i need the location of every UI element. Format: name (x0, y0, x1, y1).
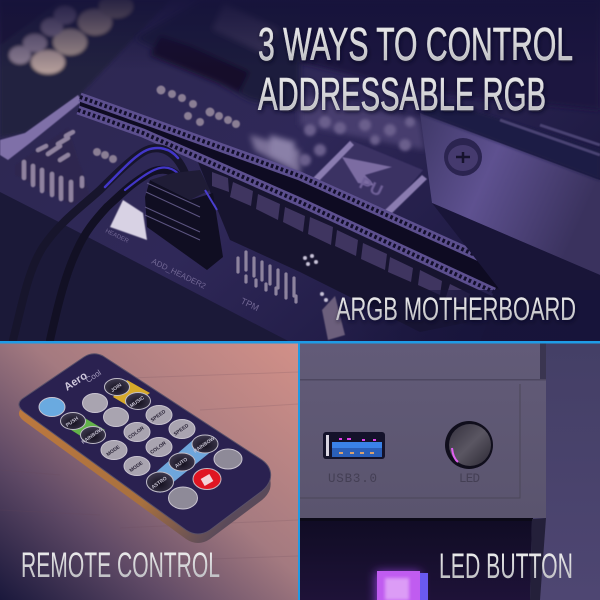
remote body: RAINBOW (193, 436, 216, 455)
button labels (106, 409, 190, 474)
remote logo: Aero (62, 370, 90, 394)
ARGB connector (145, 170, 223, 270)
panel: remote control (0, 343, 298, 600)
TPM pin header (238, 252, 296, 302)
board edge text: ADD_HEADER2 (150, 257, 208, 291)
lock button (193, 468, 221, 490)
remote buttons (39, 394, 242, 509)
remote body: ASTRO (151, 476, 168, 491)
wood grain (137, 372, 298, 558)
remote body: Cool (84, 368, 103, 385)
white connector (110, 200, 147, 240)
header pins, left (21, 129, 85, 203)
button labels: MODE (129, 460, 145, 474)
colour bands (113, 380, 150, 407)
blurred components (93, 86, 240, 163)
heatsink plate with screw (420, 100, 600, 275)
light heatsink edge (0, 95, 82, 160)
dark top face (19, 354, 271, 534)
gold side edge (19, 410, 271, 543)
blue divider lines (0, 341, 600, 600)
remote body: PUSH (65, 416, 80, 429)
remote body (19, 354, 271, 543)
panel: ARGB motherboard (0, 0, 600, 342)
panel: LED button (300, 343, 600, 600)
purple LED fan glow (377, 571, 420, 600)
chip with logo (313, 140, 427, 215)
button labels: MODE (106, 444, 122, 458)
cables (13, 148, 185, 340)
board edge text: TPM (239, 296, 261, 313)
blurred RAM / chipset region (139, 14, 599, 172)
board edge text (104, 228, 261, 313)
remote body: AUTO (174, 457, 189, 470)
blurred heatsink with capacitors (0, 0, 144, 137)
shadow band beneath PCIe slots (198, 162, 500, 332)
USB label: USB3.0 (328, 472, 377, 486)
case ledge (300, 379, 546, 380)
PCIe slots (78, 97, 524, 306)
chip with logo: PU (356, 173, 386, 201)
small right-side board parts (303, 254, 345, 340)
LED label: LED (459, 472, 480, 486)
button labels: COLOR (149, 440, 168, 456)
chokes under the slot (212, 172, 470, 306)
USB port (323, 432, 385, 459)
case dark edge (540, 343, 546, 379)
desk surface (0, 192, 290, 342)
case front (300, 343, 546, 518)
remote body: MUSIC (129, 395, 146, 409)
glass side panel (300, 518, 546, 600)
title (257, 27, 573, 116)
remote body: JOIN (110, 382, 123, 394)
board edge text: HEADER (104, 228, 130, 245)
label: remote control: REMOTE CONTROL (21, 546, 220, 585)
remote body: RAINBOW (81, 427, 104, 446)
LED push button (445, 421, 493, 469)
recessed panel outline (300, 384, 520, 498)
button labels: SPEED (173, 423, 190, 438)
button labels: COLOR (127, 425, 146, 441)
button labels: SPEED (150, 409, 167, 424)
